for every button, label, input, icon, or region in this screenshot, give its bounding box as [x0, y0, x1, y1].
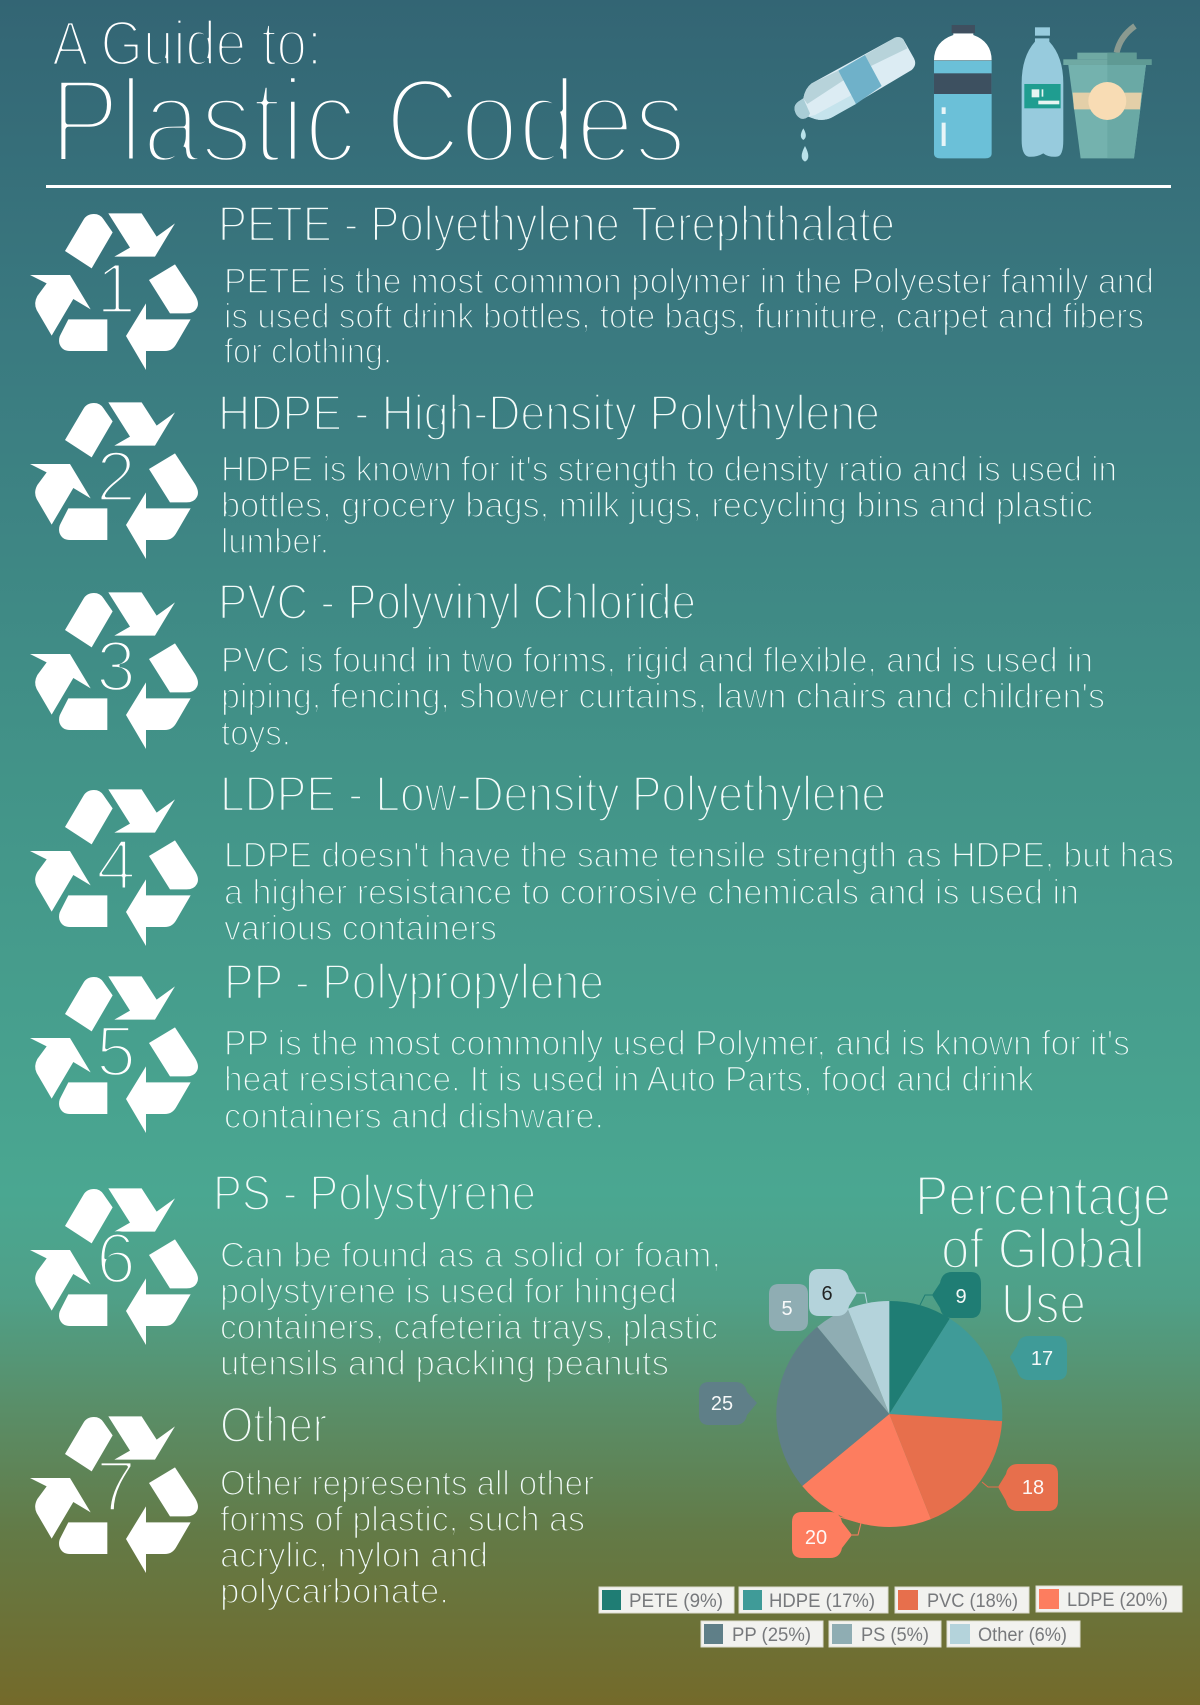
text block: Other description	[220, 1464, 594, 1611]
text block: PVC description: PVC is found in two forms, rigid and flexible, and is used in	[221, 641, 1093, 680]
text block: PETE description: for clothing.	[224, 332, 392, 371]
text block: PS description: polystyrene is used for hinged	[220, 1272, 677, 1311]
text block: PVC description: piping, fencing, shower curtains, lawn chairs and children's	[221, 677, 1105, 716]
panel: code 2 HDPE	[30, 385, 1117, 561]
label: 9	[920, 1272, 981, 1318]
icon: recycling symbol 7: 7	[96, 1448, 136, 1527]
text block: PS description: containers, cafeteria trays, plastic	[220, 1308, 718, 1347]
divider	[46, 185, 1171, 188]
text block: PS description: Can be found as a solid or foam,	[220, 1236, 721, 1275]
legend item: PP	[701, 1621, 823, 1647]
text block: PVC description: toys.	[221, 714, 291, 753]
icon: takeaway cup with straw	[1063, 26, 1152, 158]
icon: recycling symbol 2	[30, 402, 198, 559]
icon: recycling symbol 3	[30, 592, 198, 749]
icon: recycling symbol 2: 2	[96, 438, 136, 517]
legend	[599, 1586, 1182, 1647]
icon: blue bottle with white top	[934, 25, 992, 158]
legend item: PVC: PVC (18%)	[927, 1591, 1018, 1612]
data labels	[699, 1269, 1067, 1558]
label: 25	[699, 1382, 757, 1425]
text block: LDPE description: a higher resistance to corrosive chemicals and is used in	[224, 873, 1079, 912]
legend item: PP: PP (25%)	[732, 1625, 811, 1646]
panel: code 1 PETE	[30, 196, 1154, 371]
text block: PETE description: is used soft drink bottles, tote bags, furniture, carpet and fibers	[224, 297, 1144, 336]
heading: PS: PS - Polystyrene	[213, 1165, 536, 1221]
icon: recycling symbol 3: 3	[96, 628, 136, 707]
text block: PP description: heat resistance. It is used in Auto Parts, food and drink	[224, 1060, 1034, 1099]
icon: recycling symbol 4	[30, 789, 198, 946]
text block: PETE description: PETE is the most common polymer in the Polyester family and	[224, 262, 1154, 301]
icon: recycling symbol 7	[30, 1416, 198, 1573]
title	[50, 9, 686, 188]
heading: Other: Other	[220, 1397, 327, 1453]
icon: tilted pouring bottle	[795, 37, 915, 162]
label: 20	[792, 1512, 861, 1558]
label: 20: 20	[805, 1527, 827, 1549]
legend item: LDPE	[1036, 1586, 1182, 1612]
icon: recycling symbol 5	[30, 976, 198, 1133]
title: A Guide to:	[52, 9, 322, 79]
panel: code 3 PVC	[30, 574, 1105, 753]
panel: code 6 PS	[30, 1165, 721, 1383]
label: 17: 17	[1031, 1348, 1053, 1370]
label: 9: 9	[955, 1286, 967, 1308]
text block: PP description: containers and dishware.	[224, 1097, 604, 1136]
heading: LDPE: LDPE - Low-Density Polyethylene	[220, 766, 886, 822]
text block: HDPE description: bottles, grocery bags, milk jugs, recycling bins and plastic	[221, 486, 1093, 525]
heading: HDPE: HDPE - High-Density Polythylene	[218, 385, 880, 441]
icon: recycling symbol 1: 1	[96, 250, 136, 329]
panel: code 7 Other	[30, 1397, 594, 1611]
heading: PVC: PVC - Polyvinyl Chloride	[218, 574, 696, 630]
text block: Other description: acrylic, nylon and	[220, 1536, 488, 1575]
text block: LDPE description: various containers	[224, 909, 497, 948]
heading: PP: PP - Polypropylene	[224, 954, 604, 1010]
heading: Percentage of Global Use: Use	[1001, 1272, 1086, 1336]
label: 18	[982, 1464, 1058, 1511]
text block: LDPE description	[224, 836, 1174, 948]
icon: recycling symbol 6	[30, 1188, 198, 1345]
heading: Percentage of Global Use: Percentage	[915, 1164, 1171, 1228]
heading: Percentage of Global Use: of Global	[941, 1217, 1145, 1281]
text block: HDPE description: HDPE is known for it's strength to density ratio and is used in	[221, 450, 1117, 489]
text block: PS description: utensils and packing peanuts	[220, 1344, 669, 1383]
icon: recycling symbol 6: 6	[96, 1220, 136, 1299]
text block: Other description: Other represents all other	[220, 1464, 594, 1503]
panel: code 4 LDPE	[30, 766, 1174, 948]
legend item: PS	[829, 1621, 941, 1647]
legend item: PS: PS (5%)	[861, 1625, 929, 1646]
text block: PP description: PP is the most commonly used Polymer, and is known for it's	[224, 1024, 1130, 1063]
text block: HDPE description: lumber.	[221, 522, 329, 561]
text block: Other description: polycarbonate.	[220, 1572, 449, 1611]
text block: HDPE description	[221, 450, 1117, 561]
label: 6	[809, 1269, 867, 1316]
legend item: LDPE: LDPE (20%)	[1067, 1590, 1168, 1611]
heading: PETE: PETE - Polyethylene Terephthalate	[218, 196, 895, 252]
icon: recycling symbol 1	[30, 213, 198, 370]
legend item: PETE	[599, 1587, 734, 1613]
text block: PVC description	[221, 641, 1105, 753]
text block: Other description: forms of plastic, such as	[220, 1500, 585, 1539]
icon: recycling symbol 5: 5	[96, 1013, 136, 1092]
legend item: HDPE: HDPE (17%)	[769, 1591, 875, 1612]
label: 25: 25	[711, 1393, 733, 1415]
label: 5: 5	[781, 1298, 793, 1320]
legend item: PVC	[895, 1587, 1029, 1613]
legend item: Other	[947, 1621, 1080, 1647]
panel: code 5 PP	[30, 954, 1130, 1136]
pie chart	[776, 1301, 1002, 1527]
legend item: HDPE	[739, 1587, 888, 1613]
legend item: PETE: PETE (9%)	[629, 1591, 723, 1612]
text block: PP description	[224, 1024, 1130, 1136]
label: 17	[1010, 1336, 1067, 1380]
icon: recycling symbol 4: 4	[96, 826, 136, 905]
icons: plastic bottles and cup	[795, 25, 1152, 162]
legend item: Other: Other (6%)	[978, 1625, 1067, 1646]
text block: LDPE description: LDPE doesn't have the same tensile strength as HDPE, but has	[224, 836, 1174, 875]
label: 5	[769, 1284, 808, 1331]
heading: Percentage of Global Use	[915, 1164, 1171, 1336]
title: Plastic Codes	[50, 54, 686, 188]
label: 6: 6	[821, 1283, 833, 1305]
label: 18: 18	[1022, 1477, 1044, 1499]
icon: slim bottle with green label	[1022, 27, 1063, 157]
text block: PETE description	[224, 262, 1154, 371]
text block: PS description	[220, 1236, 721, 1383]
